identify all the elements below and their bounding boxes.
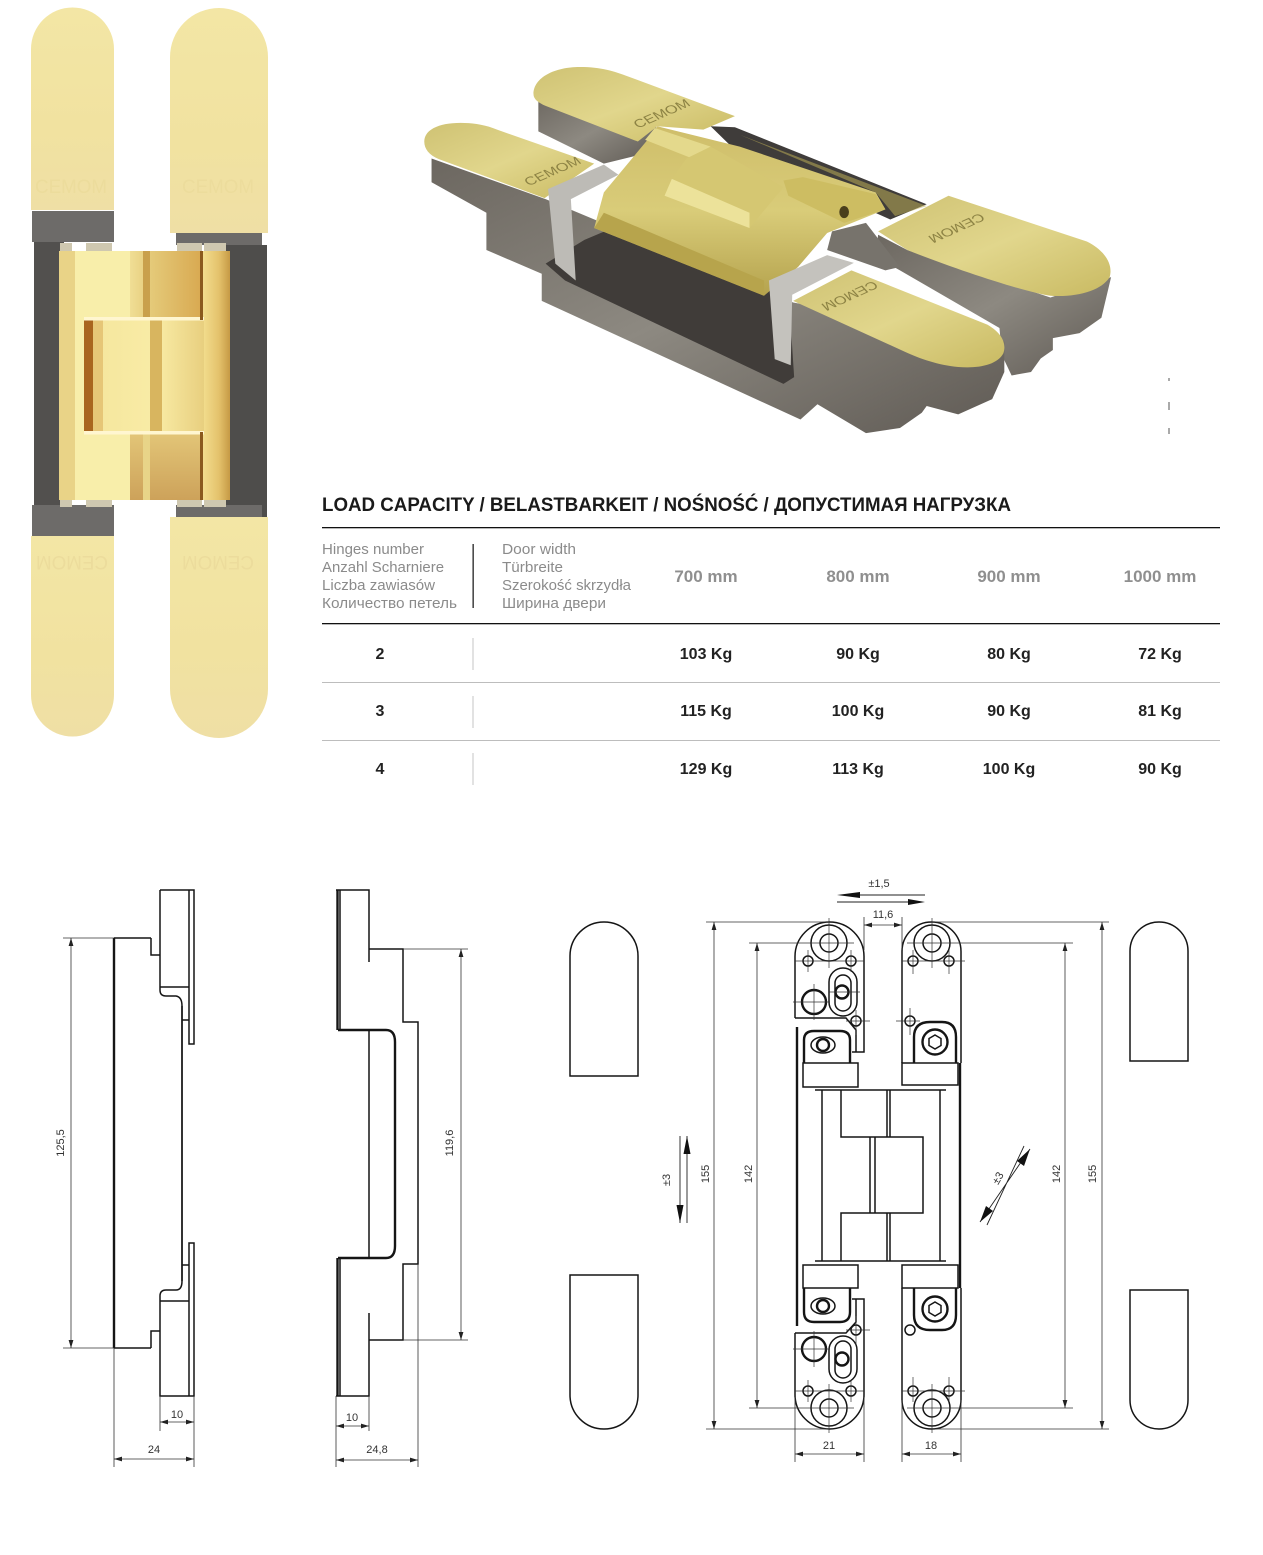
dimension 119,6 bbox=[403, 949, 468, 1340]
row: 4 hinges: 113 Kg bbox=[832, 761, 884, 778]
adjustment arrows: ±3 vertical: ±3 bbox=[661, 1174, 673, 1186]
dimension: gap 11,6: 11,6 bbox=[873, 909, 893, 921]
right leaf top bbox=[170, 8, 268, 233]
right wing top bbox=[902, 922, 961, 1063]
dimension: total height 155 right bbox=[932, 922, 1109, 1429]
back left leaf bbox=[533, 67, 735, 164]
dimension: hole spacing 142 left: 142 bbox=[743, 1165, 755, 1183]
dimension: hole spacing 142 left bbox=[743, 943, 804, 1408]
dimension 10: 10 bbox=[171, 1409, 183, 1421]
row: 4 hinges: 4 bbox=[376, 761, 385, 778]
header: door width bbox=[502, 541, 632, 612]
gold body bbox=[594, 126, 885, 296]
dimension 10 bbox=[336, 1396, 369, 1431]
right wing bottom bbox=[902, 1288, 961, 1429]
header: door width: Ширина двери bbox=[502, 595, 606, 612]
engraved logos: CEMOM bbox=[521, 155, 585, 189]
header: widths: 800 mm bbox=[826, 567, 890, 586]
dimension: hole spacing 142 right bbox=[957, 943, 1073, 1408]
row: 4 hinges: 90 Kg bbox=[1138, 761, 1182, 778]
header: hinges number: Hinges number bbox=[322, 541, 424, 558]
cover plate outlines right bbox=[1130, 922, 1188, 1429]
left leaf bottom bbox=[31, 536, 114, 736]
profile outline bbox=[114, 890, 194, 1396]
dimension: hole spacing 142 right: 142 bbox=[1051, 1165, 1063, 1183]
header: door width: Door width bbox=[502, 541, 576, 558]
dimension: gap 11,6 bbox=[864, 909, 902, 950]
row: 4 hinges: 129 Kg bbox=[680, 761, 732, 778]
technical drawing: side profile B bbox=[336, 890, 468, 1467]
header: door width: Türbreite bbox=[502, 559, 563, 576]
engraved logos bbox=[521, 97, 988, 313]
dimension 24,8 bbox=[336, 1264, 418, 1467]
row: 3 hinges: 100 Kg bbox=[832, 703, 884, 720]
cover plate outlines left bbox=[570, 922, 638, 1429]
dark recess bbox=[546, 230, 794, 384]
row: 2 hinges: 2 bbox=[376, 646, 385, 663]
header: hinges number bbox=[322, 541, 457, 612]
technical drawing: front of hinge bbox=[793, 918, 965, 1433]
back right leaf bbox=[878, 196, 1111, 296]
load capacity table bbox=[322, 494, 1220, 785]
dimension 10 bbox=[160, 1396, 194, 1431]
engraved logos: CEMOM bbox=[818, 278, 881, 313]
row: 3 hinges: 90 Kg bbox=[987, 703, 1031, 720]
dark steel housing bbox=[32, 211, 267, 536]
left bracket bbox=[548, 165, 618, 281]
header: door width: Szerokość skrzydła bbox=[502, 577, 632, 594]
gold central knuckle bbox=[59, 251, 230, 500]
header: widths bbox=[674, 567, 1196, 586]
dimension 125,5 bbox=[55, 938, 114, 1348]
header: hinges number: Liczba zawiasów bbox=[322, 577, 435, 594]
profile outline bbox=[336, 890, 418, 1396]
row: 2 hinges: 103 Kg bbox=[680, 646, 732, 663]
dimension: width 21 bbox=[795, 1397, 864, 1462]
dimension 24 bbox=[114, 1348, 194, 1467]
mechanism detail bbox=[827, 223, 900, 270]
row: 2 hinges: 90 Kg bbox=[836, 646, 880, 663]
header: hinges number: Anzahl Scharniere bbox=[322, 559, 444, 576]
adjustment arrows: ±3 diagonal bbox=[980, 1146, 1030, 1225]
embossed logos: CEMOM bbox=[182, 177, 254, 198]
photo: gold hinge 3D view bbox=[424, 67, 1111, 433]
dimension 10: 10 bbox=[346, 1412, 358, 1424]
centre lines bbox=[793, 918, 965, 1433]
header: widths: 1000 mm bbox=[1124, 567, 1196, 586]
row: 3 hinges: 3 bbox=[376, 703, 385, 720]
row: 4 hinges bbox=[376, 761, 1182, 778]
embossed logos: CEMOM bbox=[36, 551, 108, 572]
dimension: width 18 bbox=[902, 1400, 961, 1462]
adjustment arrows: ±1,5 horizontal: ±1,5 bbox=[868, 878, 890, 890]
table heading: LOAD CAPACITY / BELASTBARKEIT / NOŚNOŚĆ / ДОПУСТИМАЯ НАГРУЗКА bbox=[322, 494, 1011, 516]
main steel body bbox=[432, 158, 1004, 433]
technical drawing: side profile A bbox=[55, 890, 194, 1467]
embossed logos: CEMOM bbox=[35, 177, 107, 198]
row: 2 hinges bbox=[376, 646, 1182, 663]
row: 3 hinges: 115 Kg bbox=[680, 703, 732, 720]
embossed logos: CEMOM bbox=[182, 551, 254, 572]
header: widths: 700 mm bbox=[674, 567, 738, 586]
embossed logos bbox=[35, 177, 254, 572]
front left leaf bbox=[424, 123, 594, 198]
dimension: total height 155 right: 155 bbox=[1087, 1165, 1099, 1183]
dimension: total height 155 left: 155 bbox=[700, 1165, 712, 1183]
specks bbox=[1168, 378, 1170, 434]
dimension: width 18: 18 bbox=[925, 1440, 937, 1452]
photo: gold hinge front view bbox=[31, 8, 268, 738]
dimension 125,5: 125,5 bbox=[55, 1129, 67, 1157]
header: widths: 900 mm bbox=[977, 567, 1041, 586]
row: 2 hinges: 72 Kg bbox=[1138, 646, 1182, 663]
row: 3 hinges bbox=[376, 703, 1182, 720]
row: 3 hinges: 81 Kg bbox=[1138, 703, 1182, 720]
front right leaf bbox=[793, 270, 1004, 367]
adjustment arrows: ±3 vertical bbox=[661, 1136, 690, 1223]
adjustment arrows: ±3 diagonal: ±3 bbox=[990, 1170, 1007, 1187]
engraved logos: CEMOM bbox=[925, 210, 988, 245]
table rules bbox=[322, 527, 1220, 785]
centre body bbox=[797, 1027, 960, 1326]
header: hinges number: Количество петель bbox=[322, 595, 457, 612]
dimension: total height 155 left bbox=[700, 922, 829, 1429]
back dark strip bbox=[711, 126, 927, 220]
left wing bottom bbox=[795, 1288, 864, 1429]
dimension 24,8: 24,8 bbox=[366, 1444, 388, 1456]
right leaf bottom bbox=[170, 517, 268, 738]
dimension 119,6: 119,6 bbox=[444, 1130, 456, 1156]
dimension 24: 24 bbox=[148, 1444, 160, 1456]
dimension: width 21: 21 bbox=[823, 1440, 835, 1452]
adjustment arrows: ±1,5 horizontal bbox=[837, 878, 925, 905]
pins bbox=[60, 243, 226, 507]
back right leaf side bbox=[876, 235, 1111, 375]
engraved logos: CEMOM bbox=[630, 97, 694, 131]
right bracket bbox=[769, 255, 854, 365]
left leaf top bbox=[31, 8, 114, 210]
row: 2 hinges: 80 Kg bbox=[987, 646, 1031, 663]
row: 4 hinges: 100 Kg bbox=[983, 761, 1035, 778]
left wing top bbox=[795, 922, 864, 1063]
